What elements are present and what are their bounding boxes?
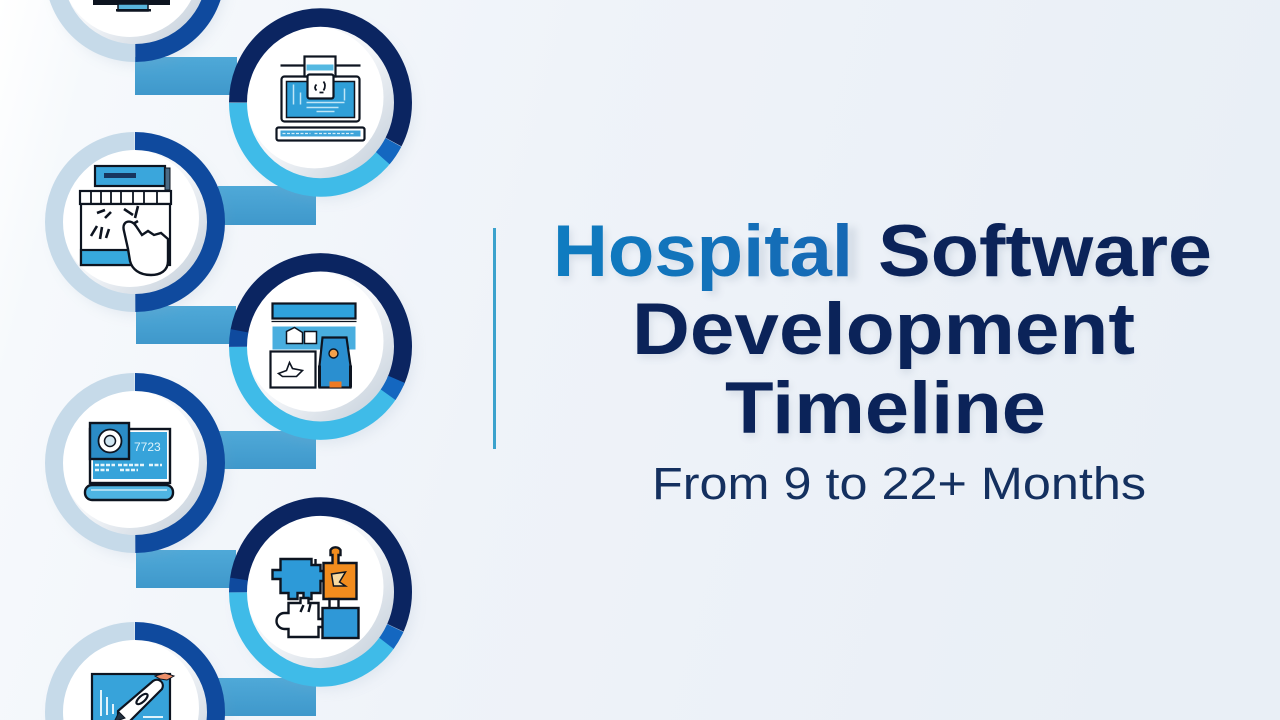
step 3: circle with interface and hand icon <box>54 141 226 315</box>
icon: laptop with target panel: 7723 <box>134 440 161 454</box>
icon: dashboard and rocket <box>270 304 356 388</box>
title word: Software: Software <box>878 211 1212 292</box>
title block: Hospital Software <box>555 215 1212 296</box>
icon: monitor <box>93 0 170 12</box>
step 5: circle with laptop and camera icon <box>54 382 226 556</box>
title block <box>553 211 1212 453</box>
title line: Timeline: Timeline <box>725 368 1046 449</box>
step 1: circle with monitor icon <box>54 0 226 65</box>
step 7: circle with blueprint and pen icon <box>54 631 226 720</box>
icon: interface with pointing hand <box>80 166 171 275</box>
step 6: circle with puzzle pieces icon <box>227 496 414 689</box>
icon: puzzle pieces <box>272 547 358 638</box>
subtitle: From 9 to 22+ Months <box>652 458 1146 509</box>
title block: Timeline <box>727 372 1046 453</box>
icon: laptop with target panel <box>85 423 173 500</box>
icon: laptop with module <box>276 56 364 140</box>
step 2: circle with laptop and module icon <box>238 18 414 200</box>
icon: blueprint with pen <box>92 673 174 720</box>
title line: Development: Development <box>632 289 1135 370</box>
vertical divider line <box>493 228 496 449</box>
title block: Development <box>634 293 1135 374</box>
connector bars <box>135 57 316 716</box>
title word: Hospital: Hospital <box>553 211 853 292</box>
step 4: circle with dashboard and rocket icon <box>225 249 416 444</box>
